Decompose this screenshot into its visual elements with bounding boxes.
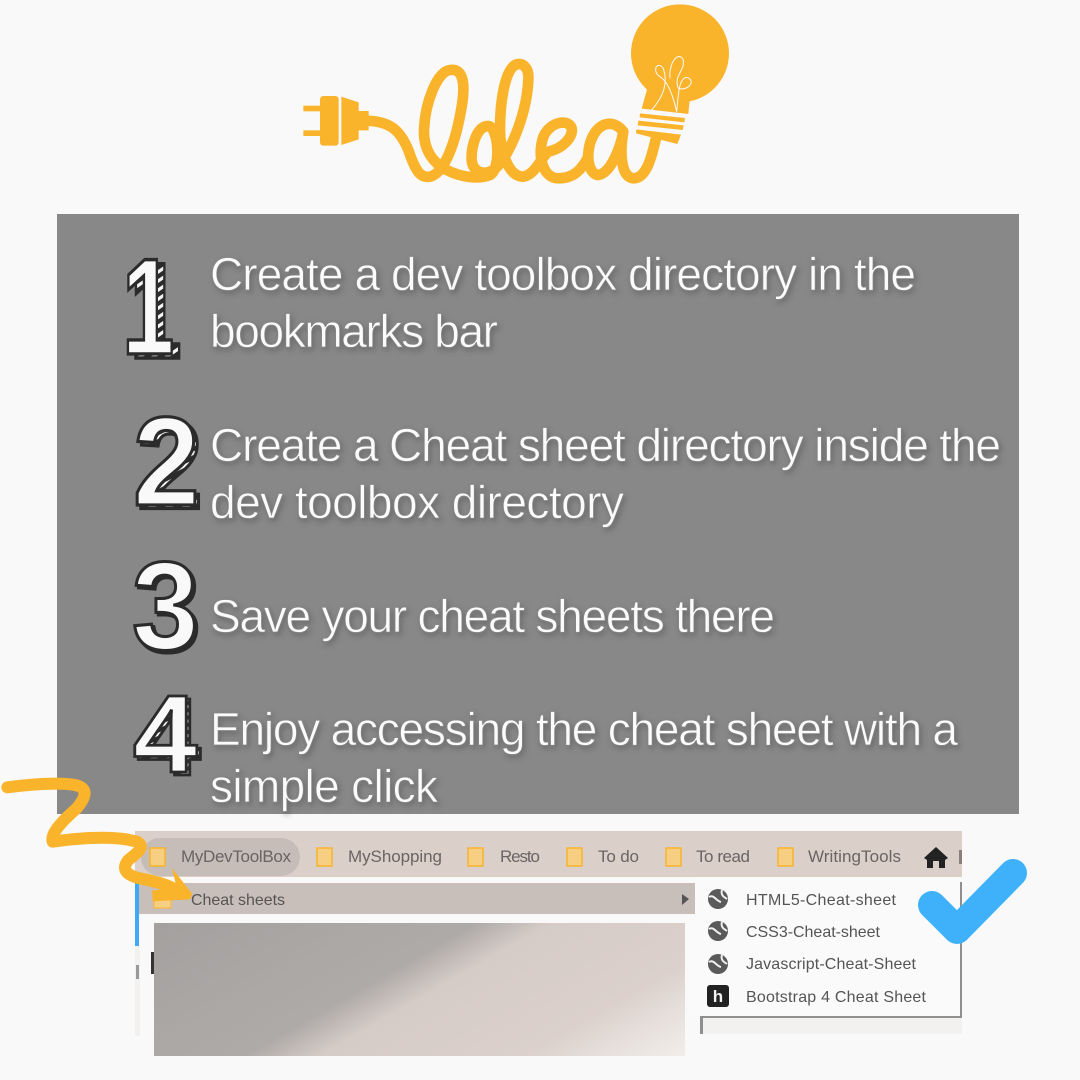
- bookmark folder icons: [150, 848, 793, 866]
- panel: steps: [57, 214, 1019, 814]
- icon: h badge: [707, 985, 729, 1007]
- icon: home: [924, 847, 948, 868]
- step 4 text: simple click: [210, 760, 439, 812]
- step 3 text: Save your cheat sheets there: [210, 590, 775, 642]
- bookmark labels: Resto: [500, 847, 540, 866]
- step 3: [132, 536, 775, 678]
- icon: plug: [303, 96, 369, 146]
- number 3: 3: [132, 536, 199, 676]
- bookmark labels: To do: [598, 847, 639, 866]
- bookmarks bar: [135, 831, 962, 877]
- browser screenshot: [135, 831, 962, 1056]
- step 1 text: bookmarks bar: [210, 305, 498, 357]
- number 4: 4: [133, 673, 198, 795]
- title word: Idea drawn as a cable: [367, 64, 656, 178]
- submenu labels: Javascript-Cheat-Sheet: [746, 956, 917, 973]
- icon: h badge: h: [713, 987, 723, 1006]
- number 1: 1: [122, 230, 174, 383]
- number 4: 4: [136, 676, 201, 799]
- arrow: squiggle pointing to Cheat sheets: [7, 784, 192, 901]
- step 1: [122, 230, 916, 387]
- icon: globes: [708, 889, 728, 974]
- cheat sheet submenu: [695, 877, 962, 1018]
- step 2 text: Create a Cheat sheet directory inside the: [210, 419, 1001, 471]
- submenu labels: [746, 892, 927, 1006]
- bookmark labels: [181, 847, 901, 866]
- Cheat sheets menu row: Cheat sheets: [191, 892, 285, 909]
- bookmark labels: WritingTools: [808, 847, 901, 866]
- title logo: Idea cable and light bulb: [303, 4, 729, 178]
- bookmark labels: MyShopping: [348, 847, 442, 866]
- step 1 text: Create a dev toolbox directory in the: [210, 248, 916, 300]
- icon: blue check mark: [932, 873, 1013, 930]
- submenu labels: Bootstrap 4 Cheat Sheet: [746, 989, 927, 1006]
- number 3: 3: [134, 538, 201, 678]
- icon: light bulb: [631, 4, 729, 144]
- step 4: [133, 673, 958, 812]
- number 1: 1: [130, 234, 182, 387]
- bookmark labels: MyDevToolBox: [181, 847, 292, 866]
- clipped bookmark label: [959, 850, 962, 864]
- Cheat sheets menu row: [139, 883, 695, 914]
- submenu labels: CSS3-Cheat-sheet: [746, 924, 881, 941]
- highlighted MyDevToolBox folder: [141, 838, 300, 876]
- step 4 text: Enjoy accessing the cheat sheet with a: [210, 703, 958, 755]
- step 2 text: dev toolbox directory: [210, 476, 624, 528]
- number 2: 2: [137, 396, 203, 536]
- blurred hidden menu area: [154, 923, 685, 1056]
- step 2: [133, 392, 1001, 536]
- bookmark labels: To read: [696, 847, 750, 866]
- submenu labels: HTML5-Cheat-sheet: [746, 892, 897, 909]
- submenu edge line: [700, 1016, 703, 1034]
- left menu edge: [135, 883, 154, 1036]
- submenu shadow area: [703, 1018, 962, 1034]
- number 2: 2: [133, 392, 200, 532]
